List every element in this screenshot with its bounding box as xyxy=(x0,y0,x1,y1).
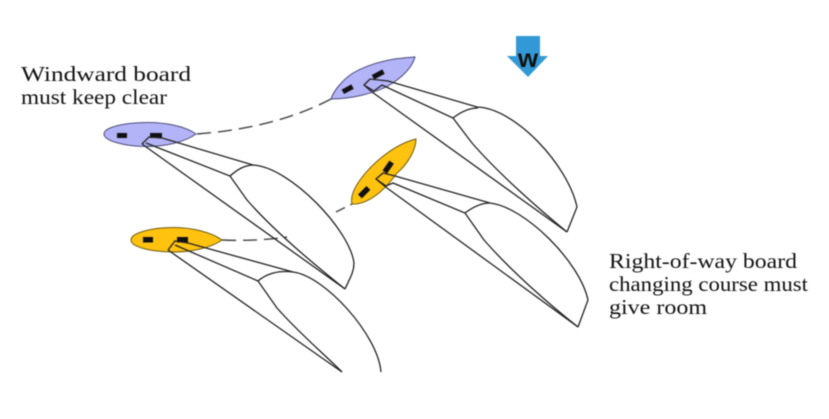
boat: blue upper xyxy=(331,57,577,232)
label: right-of-way board: Right-of-way board xyxy=(609,249,797,273)
boat: orange right xyxy=(352,139,588,327)
label: right-of-way board xyxy=(609,249,808,319)
sail: blue upper xyxy=(364,79,577,232)
icon: wind arrow xyxy=(507,36,548,77)
label: windward board: Windward board xyxy=(21,62,191,86)
label: right-of-way board: give room xyxy=(609,295,707,319)
sail: blue lower left xyxy=(142,137,354,289)
dashed course: right-of-way board xyxy=(222,204,352,240)
dashed course: windward board xyxy=(197,99,331,134)
boat: orange lower left xyxy=(131,228,381,372)
sail: orange right xyxy=(376,173,588,327)
icon: wind arrow: w xyxy=(517,43,539,73)
label: right-of-way board: changing course must xyxy=(609,272,808,296)
sail: orange lower left xyxy=(168,241,381,372)
boat: blue lower left xyxy=(104,122,354,289)
label: windward board xyxy=(21,62,191,109)
label: windward board: must keep clear xyxy=(21,85,167,109)
